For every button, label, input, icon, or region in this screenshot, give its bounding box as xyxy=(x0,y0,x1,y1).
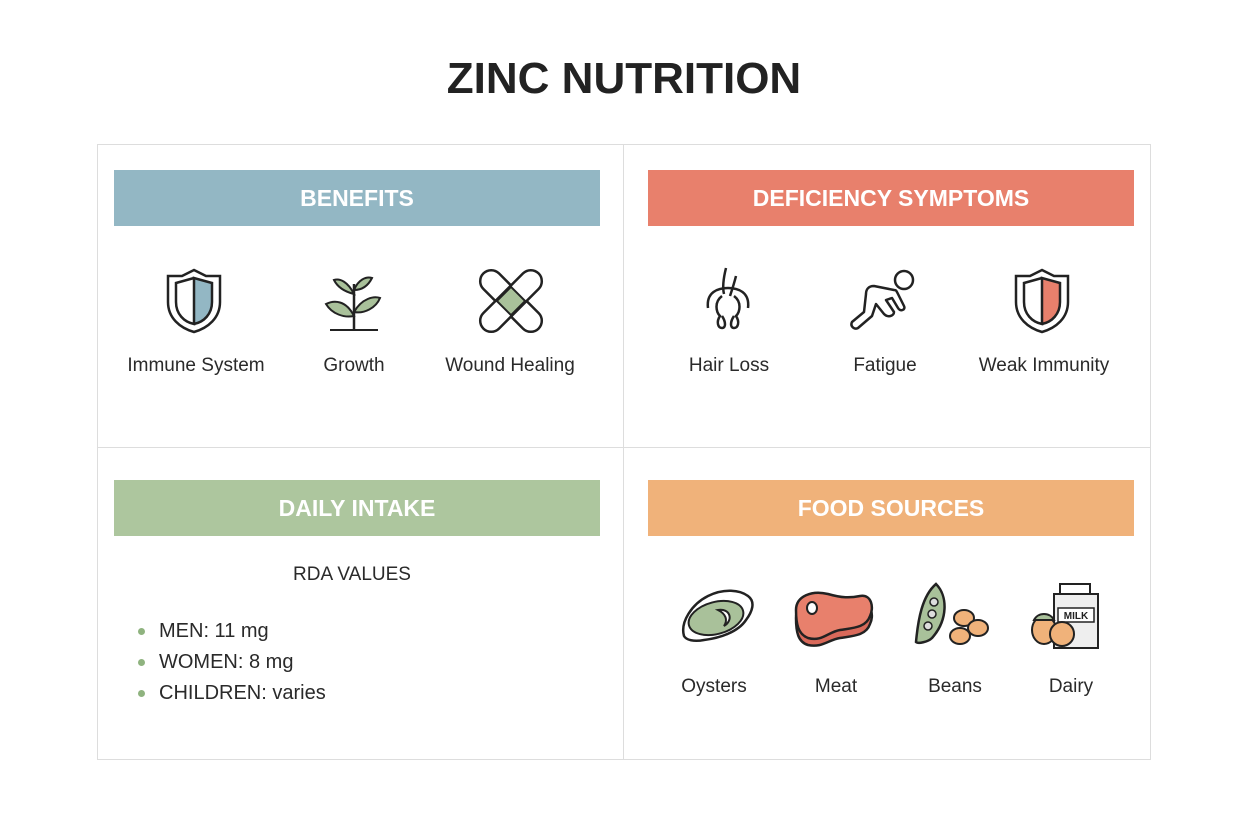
icon: weak shield xyxy=(1014,268,1070,334)
heading: food sources: FOOD SOURCES xyxy=(798,494,984,520)
label: meat: Meat xyxy=(815,676,857,697)
panel: food sources xyxy=(648,480,1134,697)
list: rda: CHILDREN: varies xyxy=(159,682,326,704)
icon: fatigue xyxy=(850,270,914,330)
label: growth: Growth xyxy=(323,355,385,376)
icon: bandage xyxy=(478,269,544,333)
icon: meat xyxy=(794,592,874,647)
list: rda: WOMEN: 8 mg xyxy=(159,651,293,673)
icon: dairy xyxy=(1031,583,1099,649)
icon: hair loss xyxy=(706,268,750,330)
heading: deficiency: DEFICIENCY SYMPTOMS xyxy=(753,184,1029,210)
icon: dairy: MILK xyxy=(1064,611,1089,622)
label: hair loss: Hair Loss xyxy=(689,355,769,376)
list: rda xyxy=(138,620,326,704)
heading: food sources xyxy=(648,480,1134,536)
label: oysters: Oysters xyxy=(681,676,747,697)
label: beans: Beans xyxy=(928,676,982,697)
panel: benefits xyxy=(114,170,600,376)
label: weak immunity: Weak Immunity xyxy=(979,355,1109,376)
heading: benefits: BENEFITS xyxy=(300,184,414,210)
icon: beans xyxy=(914,582,989,645)
title: ZINC NUTRITION xyxy=(447,54,801,103)
label: immune system: Immune System xyxy=(127,355,265,376)
label: fatigue: Fatigue xyxy=(853,355,917,376)
heading: daily intake xyxy=(114,480,600,536)
panel: daily intake xyxy=(114,480,600,704)
icon: sprout xyxy=(324,276,382,331)
heading: daily intake: DAILY INTAKE xyxy=(279,494,435,520)
label: wound healing: Wound Healing xyxy=(445,355,575,376)
subheading: rda values: RDA VALUES xyxy=(293,564,411,585)
panel: deficiency symptoms xyxy=(648,170,1134,376)
list: rda: MEN: 11 mg xyxy=(159,620,269,642)
icon: shield xyxy=(166,268,222,334)
heading: deficiency xyxy=(648,170,1134,226)
icon: oyster xyxy=(682,590,754,642)
heading: benefits xyxy=(114,170,600,226)
label: dairy: Dairy xyxy=(1049,676,1093,697)
grid frame xyxy=(97,144,1151,760)
